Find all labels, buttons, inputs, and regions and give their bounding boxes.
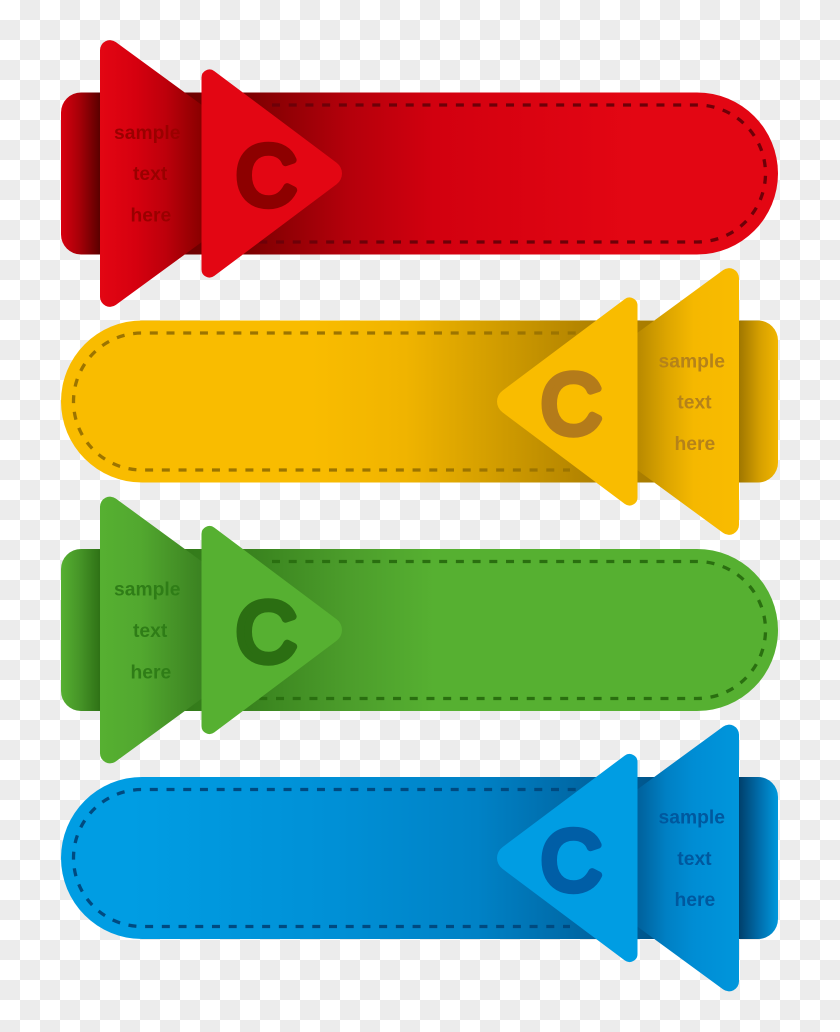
red label: text [133, 164, 168, 185]
yellow bar [61, 320, 778, 482]
blue bar [61, 777, 778, 939]
blue label: sample [658, 808, 725, 829]
red bar [61, 92, 778, 254]
red label: here [130, 206, 172, 226]
red small triangle [202, 69, 342, 277]
green large triangle [100, 497, 292, 763]
red letter C: C [236, 128, 297, 222]
yellow small triangle [497, 298, 638, 506]
blue label: text [677, 849, 712, 870]
blue large triangle [547, 725, 739, 991]
yellow dashed stitching [74, 333, 576, 470]
blue shapes [61, 725, 778, 991]
yellow shapes [61, 268, 778, 535]
yellow label: here [674, 434, 716, 455]
blue dashed stitching [74, 790, 576, 926]
green label: sample [114, 580, 181, 601]
banner: green [61, 497, 778, 763]
red label: sample [114, 123, 181, 144]
blue letter C: C [541, 814, 602, 908]
green shapes [61, 497, 778, 763]
banner: yellow [61, 268, 778, 535]
green label: here [130, 662, 172, 683]
red large triangle [100, 40, 292, 307]
yellow large triangle [547, 268, 739, 535]
banner: blue [61, 725, 778, 991]
yellow label: text [677, 392, 712, 413]
red shapes [61, 40, 778, 307]
yellow label: sample [658, 351, 725, 372]
red dashed stitching [255, 105, 766, 242]
green letter C: C [236, 585, 297, 679]
green small triangle [202, 526, 342, 734]
green dashed stitching [255, 562, 766, 698]
yellow letter C: C [541, 357, 602, 451]
green bar [61, 549, 778, 711]
banner: red [61, 40, 778, 307]
blue small triangle [497, 754, 638, 962]
green label: text [133, 621, 168, 642]
blue label: here [674, 890, 716, 911]
